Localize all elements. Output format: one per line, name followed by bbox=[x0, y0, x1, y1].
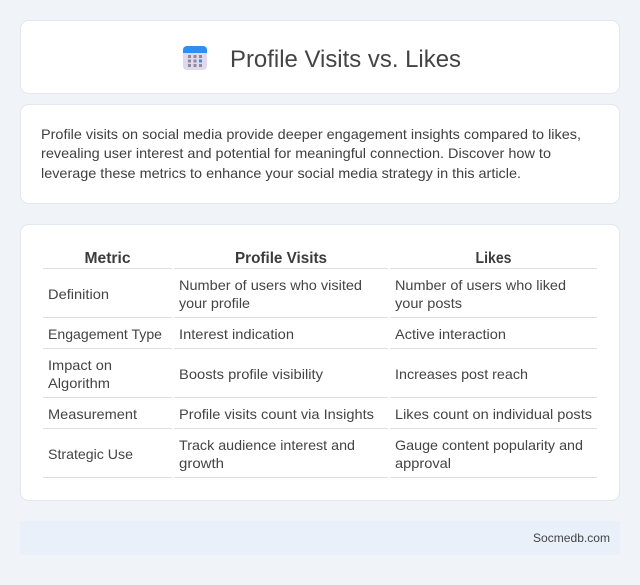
text block: introduction: Profile visits on social media provide deeper engagement insights compared to likes, bbox=[41, 126, 581, 142]
row: engagement type: Engagement Type bbox=[48, 326, 162, 342]
row: definition: your posts bbox=[395, 295, 462, 311]
row: strategic use: approval bbox=[395, 455, 451, 471]
row: strategic use bbox=[48, 437, 583, 471]
panel: comparison table bbox=[20, 224, 620, 500]
title: Profile Visits vs. Likes bbox=[230, 46, 461, 73]
row: impact on algorithm bbox=[48, 357, 528, 391]
row: strategic use: Track audience interest and bbox=[179, 437, 355, 453]
icon: calendar bbox=[183, 46, 207, 70]
row: impact on algorithm: Impact on bbox=[48, 357, 112, 373]
row: definition: Number of users who liked bbox=[395, 277, 566, 293]
row: measurement bbox=[48, 406, 592, 422]
footer: source: Socmedb.com bbox=[533, 531, 610, 545]
row: impact on algorithm: Algorithm bbox=[48, 375, 110, 391]
row: definition: your profile bbox=[179, 295, 250, 311]
panel: title card bbox=[20, 20, 620, 94]
table header bbox=[84, 250, 512, 267]
row: engagement type: Active interaction bbox=[395, 326, 506, 342]
row: strategic use: Gauge content popularity and bbox=[395, 437, 583, 453]
footer bbox=[20, 521, 620, 555]
panel: introduction bbox=[20, 104, 620, 204]
table header: Likes bbox=[476, 250, 512, 267]
row: strategic use: Strategic Use bbox=[48, 446, 133, 462]
row: impact on algorithm: Increases post reach bbox=[395, 366, 528, 382]
row: definition bbox=[48, 277, 566, 311]
row: strategic use: growth bbox=[179, 455, 224, 471]
row: definition: Definition bbox=[48, 286, 109, 302]
row: engagement type bbox=[48, 326, 506, 342]
row: measurement: Measurement bbox=[48, 406, 137, 422]
row: impact on algorithm: Boosts profile visibility bbox=[179, 366, 323, 382]
row: measurement: Profile visits count via Insights bbox=[179, 406, 374, 422]
row: definition: Number of users who visited bbox=[179, 277, 362, 293]
text block: introduction: leverage these metrics to enhance your social media strategy in this article. bbox=[41, 165, 521, 181]
row: engagement type: Interest indication bbox=[179, 326, 294, 342]
text block: introduction: revealing user interest and potential for meaningful connection. Discover how to bbox=[41, 145, 551, 161]
table header: Profile Visits bbox=[235, 250, 327, 267]
row: measurement: Likes count on individual posts bbox=[395, 406, 592, 422]
table header: Metric bbox=[84, 250, 131, 267]
